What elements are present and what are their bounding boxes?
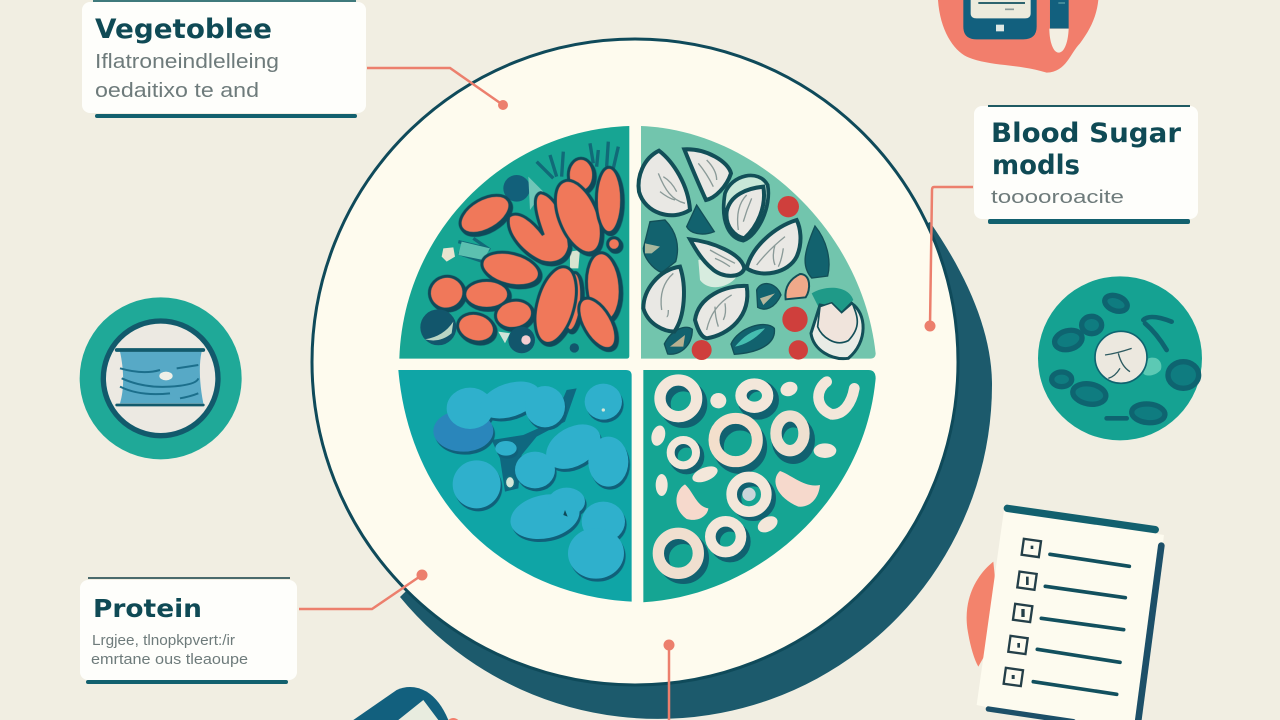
test strip pen xyxy=(1049,0,1069,53)
card: blood sugar: Blood Sugar xyxy=(991,118,1182,149)
icon: food in teal circle xyxy=(1038,276,1202,440)
icon: glucose meter xyxy=(938,0,1098,73)
card: protein: Lrgjee, tlnopkpvert:/ir xyxy=(92,632,235,649)
card: vegetables: Vegetoblee xyxy=(95,14,272,45)
card: vegetables xyxy=(82,0,366,118)
icon: partial device at bottom xyxy=(353,687,458,720)
icon: checklist xyxy=(967,508,1164,720)
connector: vegetables xyxy=(367,68,508,110)
icon: abdomen in teal circle xyxy=(80,297,242,459)
plate shadow xyxy=(400,222,992,719)
card: protein: Protein xyxy=(93,594,202,623)
panel: grains and rings quadrant xyxy=(643,370,876,602)
connector: bottom xyxy=(664,640,674,720)
card: blood sugar: tooooroacite xyxy=(991,187,1124,207)
card: vegetables: Iflatroneindlelleing xyxy=(95,51,279,73)
connector: protein xyxy=(299,570,428,609)
panel: onions and berries quadrant xyxy=(639,126,876,360)
panel: vegetables quadrant xyxy=(399,126,629,359)
plate xyxy=(312,39,958,685)
card: blood sugar: modls xyxy=(992,150,1080,181)
card: blood sugar xyxy=(974,105,1198,224)
card: vegetables: oedaitixo te and xyxy=(95,80,259,102)
panel: protein quadrant xyxy=(398,370,632,602)
connector: blood sugar xyxy=(924,187,973,332)
card: protein: emrtane ous tleaoupe xyxy=(91,651,248,668)
card: protein xyxy=(80,577,297,684)
